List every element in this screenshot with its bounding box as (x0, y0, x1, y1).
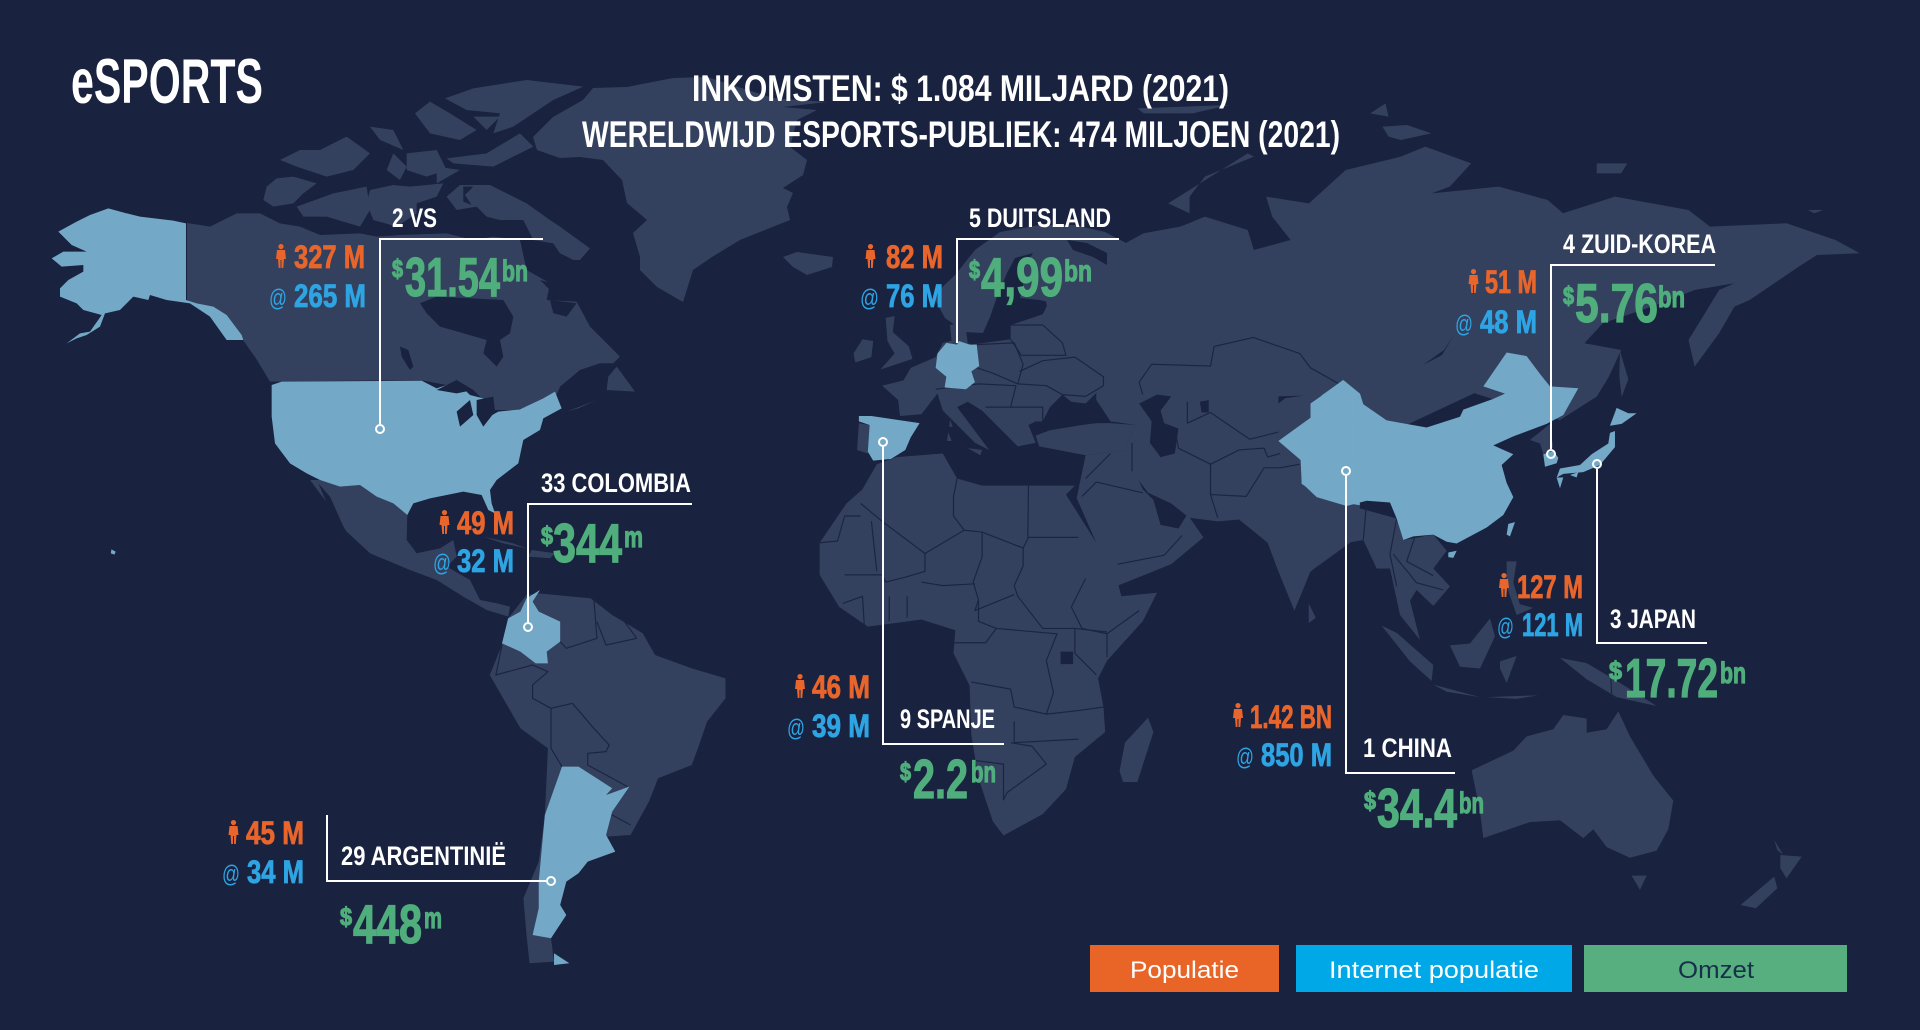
callout: China: bn (1459, 787, 1484, 820)
map: hudson bay and lakes (400, 187, 577, 370)
callout: Colombia (433, 468, 692, 631)
heading: global revenue and audience (582, 68, 1340, 155)
callout: China: 850 M (1261, 737, 1332, 773)
callout: Japan: @ (1497, 614, 1514, 641)
callout: Argentinië: @ (222, 861, 240, 888)
title: eSPORTS (71, 47, 263, 117)
map: southeast asia borders (1363, 501, 1612, 697)
callout: Colombia: m (624, 521, 643, 554)
callout: Spanje: $ (900, 758, 911, 786)
map: scandinavia (933, 225, 1454, 365)
callout: Colombia: 344 (553, 512, 622, 574)
callout: Zuid-Korea (1455, 229, 1716, 458)
legend item: Internet populatie (1296, 945, 1572, 992)
callout: Colombia: @ (433, 550, 451, 577)
map: hawaii (111, 549, 116, 555)
heading: global revenue and audience: INKOMSTEN: $ 1.084 MILJARD (2021) (692, 68, 1229, 109)
callout: China (1233, 467, 1484, 839)
callout: Argentinië: 448 (353, 893, 422, 955)
callout: Spanje: 9 SPANJE (900, 704, 995, 734)
callout: Zuid-Korea: 5.76 (1575, 272, 1658, 334)
callout: Argentinië: 29 ARGENTINIË (341, 841, 506, 871)
callout: Japan: 3 JAPAN (1610, 604, 1696, 634)
callout: Spanje: bn (971, 756, 996, 789)
callout: Argentinië: $ (340, 903, 352, 931)
map: greenland and iceland land (533, 77, 833, 302)
map: south america land (490, 593, 725, 963)
callout: Japan: bn (1720, 657, 1746, 690)
callout: Spanje (787, 438, 1004, 810)
callout: VS: 31.54 (405, 246, 500, 308)
callout: Argentinië: 45 M (246, 815, 304, 851)
map: alaska highlighted (52, 208, 243, 343)
callout: Duitsland: 5 DUITSLAND (969, 203, 1111, 233)
callout: VS: 265 M (294, 278, 366, 314)
callout: Argentinië (222, 815, 555, 955)
callout: VS: bn (502, 255, 528, 288)
callout: Japan: $ (1609, 657, 1622, 685)
callout: China: @ (1236, 744, 1254, 771)
legend item: Populatie (1090, 945, 1279, 992)
callout: Zuid-Korea: bn (1658, 281, 1685, 314)
callout: Colombia: 32 M (457, 543, 514, 579)
callout: China: 34.4 (1377, 777, 1457, 839)
callout: Zuid-Korea: 4 ZUID-KOREA (1563, 229, 1716, 259)
callout: Argentinië: m (424, 902, 442, 935)
callout: VS: 327 M (294, 239, 365, 275)
map: europe, africa and western asia borders (820, 325, 1339, 800)
heading: global revenue and audience: WERELDWIJD ESPORTS-PUBLIEK: 474 MILJOEN (2021) (582, 114, 1340, 155)
map: inland seas (1043, 393, 1303, 664)
callout: VS: @ (269, 285, 287, 312)
callout: Zuid-Korea: @ (1455, 311, 1473, 338)
legend item: Internet populatie: Internet populatie (1329, 957, 1539, 984)
callout: Duitsland: $ (969, 256, 980, 284)
callout: Duitsland (860, 203, 1119, 343)
map: western china, germany and spain highlighted (859, 341, 1360, 505)
callout: China: 1 CHINA (1363, 733, 1452, 763)
legend item: Populatie: Populatie (1130, 957, 1239, 984)
callout: China: $ (1364, 787, 1376, 815)
callout: Zuid-Korea: $ (1563, 282, 1574, 310)
map: northern asia land (1046, 103, 1860, 433)
callout: Japan: 121 M (1522, 607, 1583, 643)
map: china, japan, south korea highlighted (1300, 352, 1637, 558)
callout: Colombia: 33 COLOMBIA (541, 468, 691, 498)
callout: Colombia: 49 M (457, 505, 514, 541)
callout: China: 1.42 BN (1250, 699, 1332, 735)
legend item: Omzet (1584, 945, 1847, 992)
map: southeast asia, oceania land (1300, 351, 1673, 890)
callout: Zuid-Korea: 48 M (1480, 304, 1537, 340)
map: mexico, central america and caribbean (310, 367, 635, 617)
map: canada and arctic islands land (187, 80, 620, 410)
callout: Spanje: 46 M (812, 669, 870, 705)
callout: VS (269, 203, 543, 433)
callout: Japan: 17.72 (1625, 647, 1718, 709)
callout: Zuid-Korea: 51 M (1485, 264, 1537, 300)
legend item: Omzet: Omzet (1678, 957, 1754, 984)
callout: VS: 2 VS (392, 203, 437, 233)
map: great lakes (318, 380, 495, 530)
callout: Spanje: @ (787, 715, 805, 742)
map: new zealand (1741, 840, 1802, 908)
legend (1090, 945, 1847, 992)
callout: Argentinië: 34 M (247, 854, 304, 890)
callout: Duitsland: 82 M (886, 239, 943, 275)
callout: Japan: 127 M (1517, 569, 1583, 605)
map: continental USA highlighted (272, 381, 562, 515)
callout: VS: $ (392, 255, 403, 283)
map: argentina and colombia highlighted (502, 590, 629, 965)
callout: Duitsland: 4,99 (981, 246, 1063, 308)
map: europe, africa and western asia land (820, 300, 1360, 836)
callout: Colombia: $ (541, 522, 553, 550)
callout: Spanje: 39 M (812, 708, 870, 744)
callout: Duitsland: @ (860, 285, 879, 312)
callout: Duitsland: 76 M (886, 278, 943, 314)
callout: Duitsland: bn (1064, 255, 1092, 288)
map: south america borders (496, 598, 637, 825)
callout: Spanje: 2.2 (913, 748, 968, 810)
callout: Japan (1497, 460, 1746, 709)
